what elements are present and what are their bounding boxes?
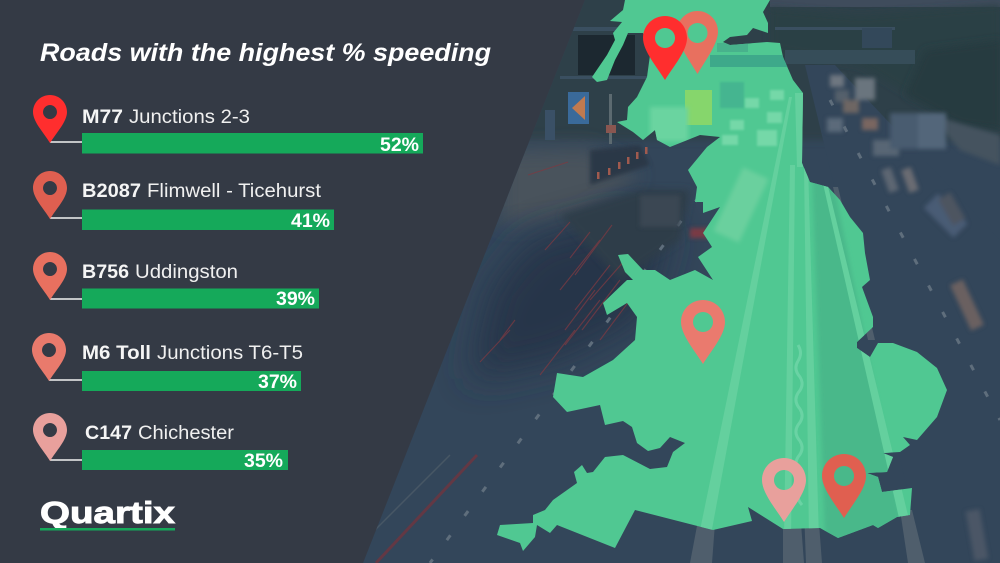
row: M6 Toll: 37% xyxy=(258,371,297,393)
row: B756 xyxy=(33,252,319,310)
pin: C147 on map xyxy=(762,458,806,522)
row: M77 xyxy=(33,95,423,156)
pin: M77 on map xyxy=(643,16,687,80)
blurred traffic xyxy=(640,75,988,561)
pin: B2087 on map xyxy=(822,454,866,518)
motorway photo background xyxy=(340,0,1000,563)
row: B2087: B2087 xyxy=(82,181,141,202)
row: B756: Uddingston xyxy=(135,262,238,283)
row: B756: 39% xyxy=(276,288,315,310)
row: B2087 xyxy=(33,171,334,232)
row: M77: M77 xyxy=(82,107,123,128)
pin: M6 Toll on map xyxy=(681,300,725,364)
row: M6 Toll xyxy=(32,333,303,393)
row: B2087: Flimwell - Ticehurst xyxy=(147,181,322,202)
map: darker road surface showing through xyxy=(812,182,900,538)
logo: Quartix: Quartix xyxy=(40,495,176,530)
row: M6 Toll: Junctions T6-T5 xyxy=(157,343,303,364)
row: C147: C147 xyxy=(85,423,132,444)
row: M77: Junctions 2-3 xyxy=(129,107,250,128)
row: C147: 35% xyxy=(244,450,283,472)
row: M6 Toll: M6 Toll xyxy=(82,343,151,364)
row: C147: Chichester xyxy=(138,423,235,444)
map: road-sign and vehicle detail xyxy=(650,43,790,243)
UK map xyxy=(490,0,960,563)
row: M77: 52% xyxy=(380,134,419,156)
title: Roads with the highest % speeding xyxy=(40,39,491,67)
pin: Flimwell on map, behind M77 pin xyxy=(677,11,718,74)
row: B756: B756 xyxy=(82,262,129,283)
lane markings xyxy=(690,187,925,563)
red light streaks xyxy=(480,162,630,375)
row: B2087: 41% xyxy=(291,210,330,232)
traffic cones xyxy=(597,147,648,179)
row: C147 xyxy=(33,413,288,472)
map: lane markings showing through xyxy=(698,93,914,540)
